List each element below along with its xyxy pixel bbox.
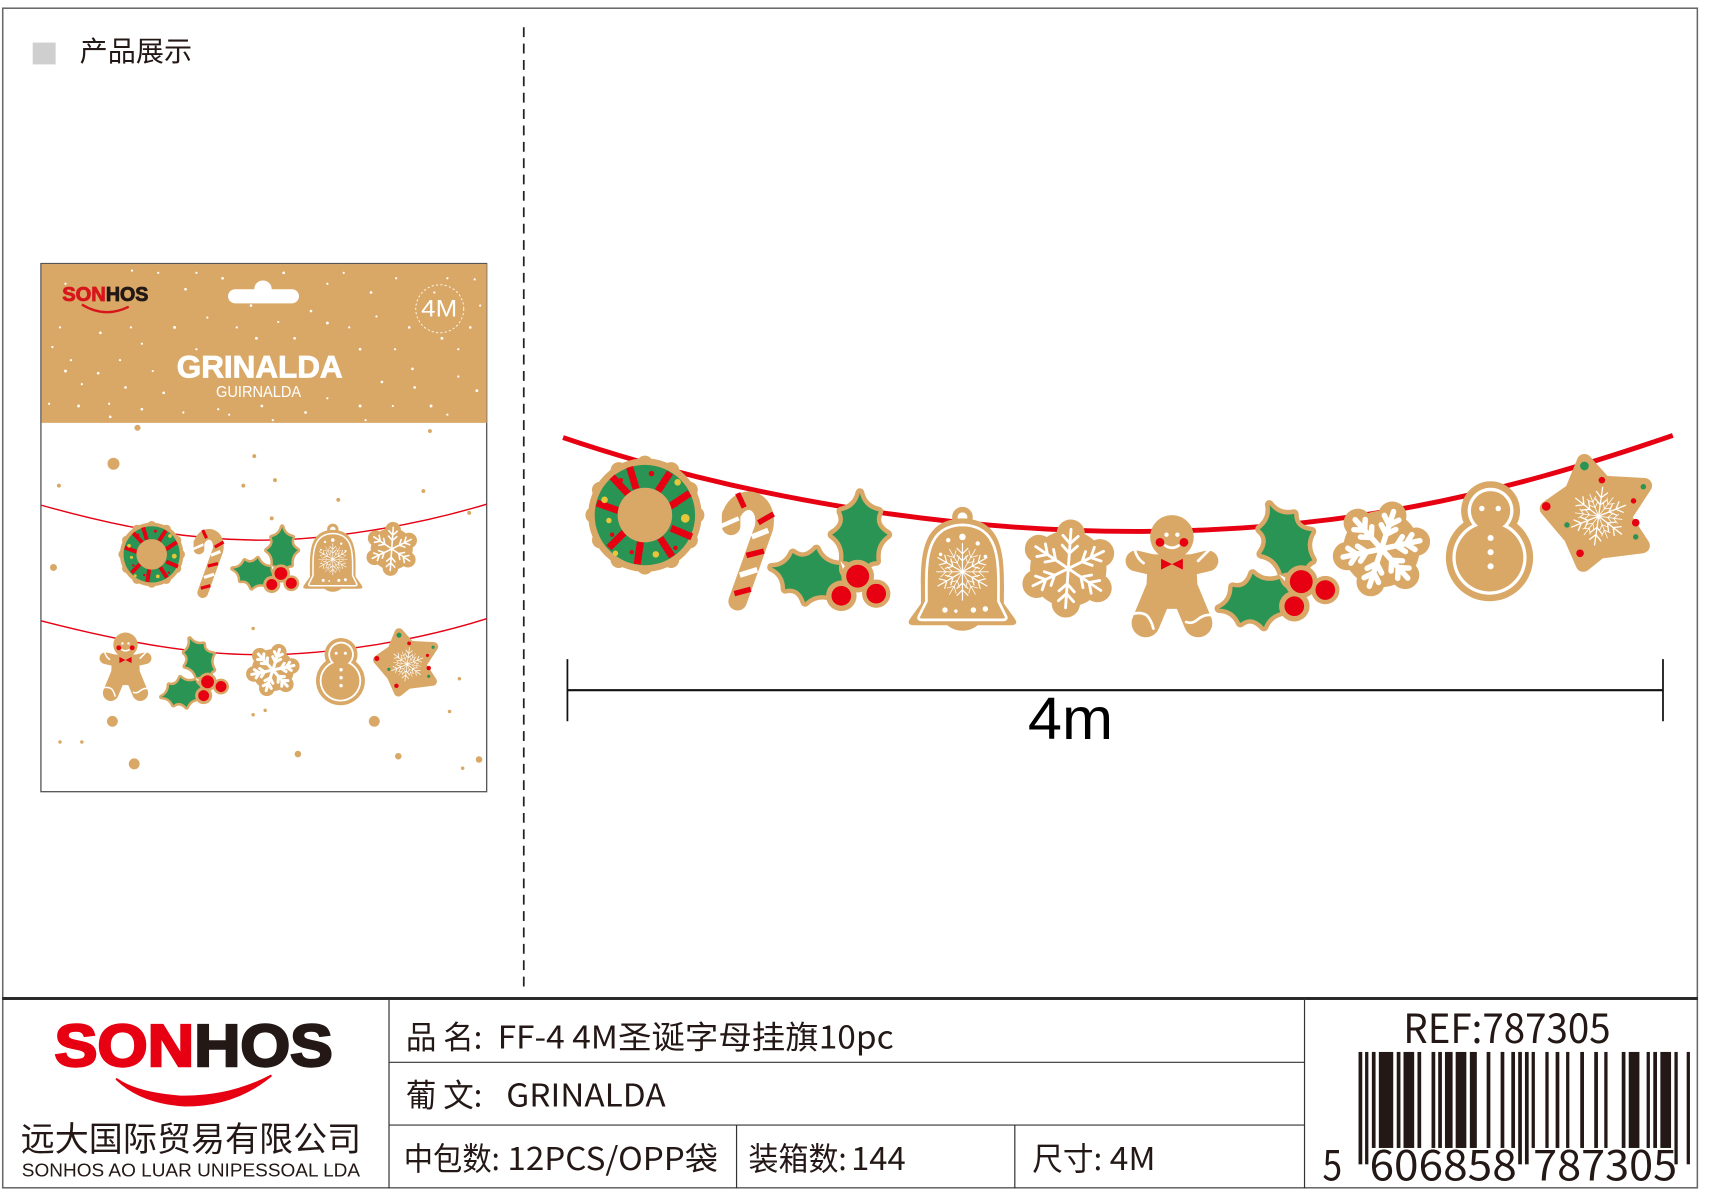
footer rule xyxy=(2,997,1698,1000)
ornament: holly left xyxy=(766,493,890,611)
package title: GRINALDA xyxy=(177,349,343,385)
company logo: SON xyxy=(55,1014,194,1079)
package subtitle: GUIRNALDA xyxy=(216,384,302,401)
heading: product display: 产品展示 xyxy=(80,30,192,70)
field: carton quantity xyxy=(749,1134,906,1180)
barcode: 787305 xyxy=(1533,1133,1677,1193)
footer table lines xyxy=(388,998,1305,1188)
company logo xyxy=(55,1014,333,1105)
company name Chinese: 远大国际贸易有限公司 xyxy=(21,1112,361,1161)
ornament: snowflake left xyxy=(1020,516,1116,621)
field: size: 4M xyxy=(1110,1134,1156,1180)
package header band xyxy=(41,264,487,423)
4M badge: 4M xyxy=(421,295,457,322)
dimension: 4m xyxy=(567,659,1663,752)
field: carton quantity: 装箱数: xyxy=(749,1134,847,1180)
heading: product display xyxy=(33,30,192,70)
field: Portuguese name: GRINALDA xyxy=(506,1070,666,1116)
field: product name: FF-4 4M圣诞字母挂旗10pc xyxy=(498,1013,894,1059)
ornament: gingerbread man xyxy=(1132,515,1212,629)
field: size: 尺寸: xyxy=(1032,1134,1102,1180)
hanger hole xyxy=(228,280,299,303)
scattered tan dots xyxy=(50,425,482,770)
panel: package xyxy=(41,264,487,792)
field: product name: 品 名: xyxy=(406,1013,482,1059)
ornament: holly right xyxy=(1184,492,1345,651)
barcode: 606858 xyxy=(1369,1133,1517,1193)
package strings xyxy=(41,504,487,655)
barcode xyxy=(1323,1052,1690,1193)
field: inner pack: 12PCS/OPP袋 xyxy=(507,1134,718,1180)
company logo: HOS xyxy=(194,1014,333,1079)
mini logo: HOS xyxy=(106,283,149,306)
4M badge xyxy=(416,285,464,333)
ornament: candy cane xyxy=(721,493,774,601)
ornament: snowman xyxy=(1446,481,1533,601)
dimension: 4m: 4m xyxy=(1028,687,1113,752)
main garland xyxy=(563,435,1673,651)
field: Portuguese name xyxy=(406,1070,666,1116)
package ornaments xyxy=(103,520,435,721)
field: carton quantity: 144 xyxy=(851,1134,906,1180)
mini logo xyxy=(62,283,149,312)
mini logo: SON xyxy=(62,283,106,306)
field: inner pack xyxy=(404,1134,718,1180)
company name Latin: SONHOS AO LUAR UNIPESSOAL LDA xyxy=(22,1159,361,1180)
ornament: wreath xyxy=(585,456,704,575)
field: Portuguese name: 葡 文: xyxy=(406,1070,482,1116)
ornament: snowflake right xyxy=(1324,488,1439,609)
reference code: REF:787305 xyxy=(1403,996,1611,1055)
barcode digits: 5 xyxy=(1323,1133,1342,1193)
divider: vertical dashed line xyxy=(523,27,525,988)
header snow dots xyxy=(48,270,481,421)
garland string xyxy=(563,435,1673,531)
field: inner pack: 中包数: xyxy=(404,1134,500,1180)
ornament: star cookie xyxy=(1542,462,1646,564)
ornament: bell xyxy=(909,510,1016,631)
field: size xyxy=(1032,1134,1156,1180)
